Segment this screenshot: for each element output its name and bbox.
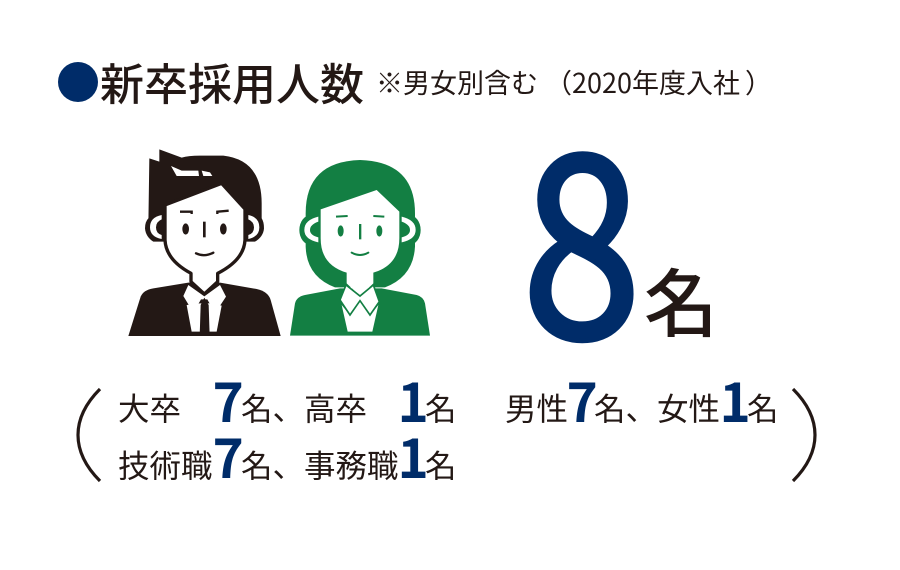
- unit: 名: [644, 246, 718, 352]
- total count: [522, 50, 718, 409]
- education breakdown: 名: [425, 384, 457, 430]
- job type breakdown: 1: [398, 418, 429, 494]
- gender breakdown: 7: [566, 362, 598, 438]
- right parenthesis: [793, 389, 815, 481]
- education breakdown: [118, 362, 457, 438]
- heading note: ※男女別含む: [376, 62, 538, 101]
- heading bullet: [58, 62, 98, 102]
- gender breakdown: 名: [747, 384, 779, 430]
- job type breakdown: 7: [212, 418, 244, 494]
- heading: [58, 49, 772, 113]
- large number 8: 8: [522, 50, 641, 409]
- job type breakdown: 名: [425, 441, 457, 487]
- gender breakdown: 名、女性: [594, 384, 720, 430]
- breakdown: [78, 362, 815, 494]
- education breakdown: 大卒: [118, 384, 181, 430]
- left parenthesis: [78, 389, 100, 481]
- gender breakdown: 男性: [505, 384, 568, 430]
- icon: female employee: [290, 160, 430, 336]
- education breakdown: 名、高卒: [241, 384, 367, 430]
- heading title: 新卒採用人数: [100, 49, 364, 113]
- job type breakdown: 技術職: [118, 441, 213, 487]
- heading note: ）: [745, 62, 772, 101]
- heading note: 2020年度入社: [572, 62, 740, 101]
- gender breakdown: 1: [720, 362, 751, 438]
- icon: male employee: [128, 149, 281, 336]
- job type breakdown: [118, 418, 457, 494]
- job type breakdown: 名、事務職: [241, 441, 399, 487]
- education breakdown: 1: [398, 362, 429, 438]
- gender breakdown: [505, 362, 779, 438]
- heading note: （: [545, 62, 572, 101]
- education breakdown: 7: [212, 362, 244, 438]
